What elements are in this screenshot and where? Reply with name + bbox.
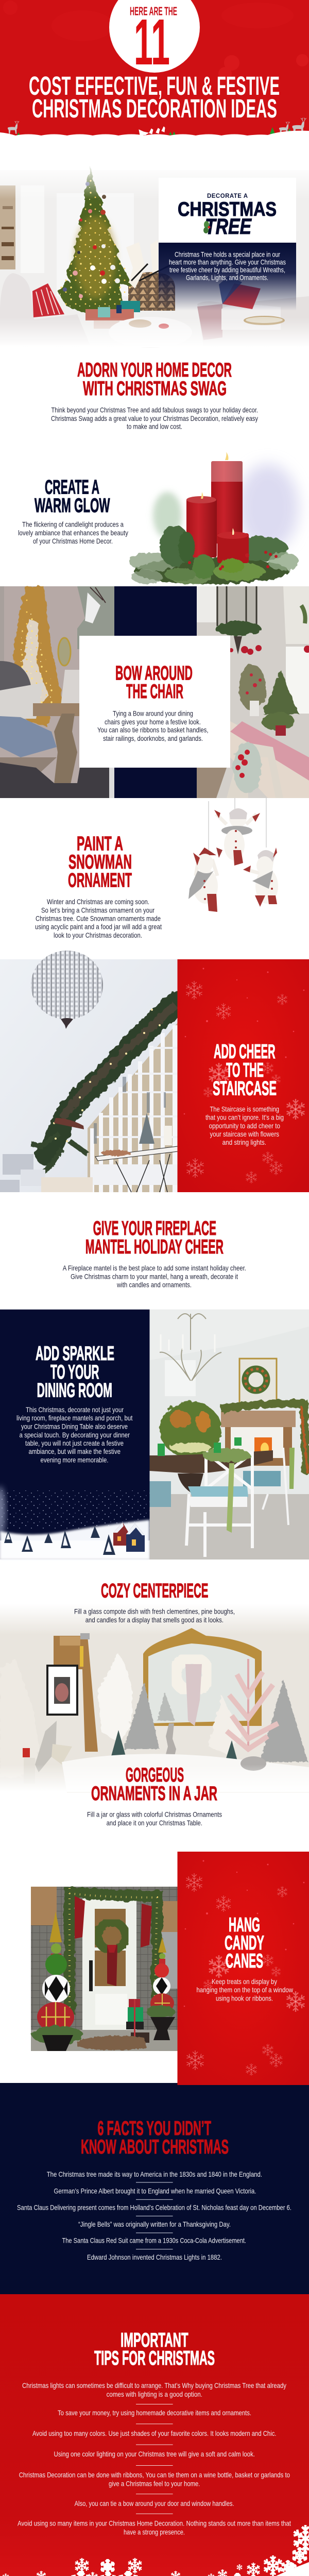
mirror and wreath (239, 1359, 277, 1406)
text: candy canes paragraph (197, 1977, 294, 2003)
heading: create a warm glow (35, 476, 110, 517)
heading: important tips: IMPORTANT (121, 2329, 188, 2351)
heading: cozy centerpiece: COZY CENTERPIECE (101, 1580, 208, 1602)
text: swag paragraph: Think beyond your Christmas Tree and add fabulous swags to your holiday decor. (52, 406, 258, 414)
title (29, 71, 280, 123)
decorative snowflakes (184, 1860, 306, 2076)
text: staircase paragraph: that you can’t ignore. It’s a big (205, 1113, 284, 1122)
icon: small green trees (17, 127, 292, 135)
heading: gorgeous ornaments in a jar: GORGEOUS (126, 1764, 184, 1786)
heading: bow around the chair: BOW AROUND (115, 662, 193, 684)
snow ground (0, 2562, 309, 2576)
round dining table (149, 1450, 273, 1473)
list of tips: comes with lighting is a good option. (107, 2390, 202, 2398)
chandelier (160, 1314, 221, 1381)
panel: bow around the chair (79, 636, 230, 768)
icon: holly (203, 221, 210, 233)
header panel (0, 0, 309, 142)
text: centerpiece paragraph: Fill a glass compote dish with fresh clementines, pine boughs, (74, 1607, 235, 1616)
photo: living room with Christmas tree (0, 163, 309, 348)
text: jar paragraph: Fill a jar or glass with colorful Christmas Ornaments (87, 1810, 222, 1819)
text: warm glow paragraph: The flickering of candlelight produces a (22, 520, 124, 529)
text: tree paragraph (169, 250, 286, 282)
text: staircase paragraph (205, 1105, 284, 1146)
front holly leaves and berries (165, 532, 278, 581)
heading: create a warm glow: WARM GLOW (35, 495, 110, 517)
text: fireplace paragraph: Give Christmas charm to your mantel, hang a wreath, decorate it (71, 1272, 238, 1280)
photo: right dining room with lantern (197, 586, 309, 798)
text: staircase paragraph: and string lights. (222, 1138, 266, 1146)
icon: reindeer right pair (279, 118, 306, 134)
heading: decorate a christmas tree: TREE (205, 214, 252, 239)
text: tree paragraph: Garlands, Lights, and Ornaments. (186, 274, 268, 282)
left candle (186, 492, 217, 557)
white console (62, 1754, 309, 1793)
heading: add cheer to the staircase (213, 1041, 277, 1100)
red ribbons (75, 1896, 152, 1947)
christmas tree (58, 166, 133, 313)
stockings and nutcracker (23, 1721, 72, 1784)
red striped pillow (32, 283, 64, 317)
navy text card (159, 243, 296, 311)
heading: facts: 6 FACTS YOU DIDN’T (97, 2117, 211, 2140)
left topiary (32, 1911, 83, 2051)
panel: navy centre block (114, 586, 197, 798)
number badge circle (109, 0, 200, 73)
chair back with red berries (227, 742, 283, 798)
lantern (215, 586, 261, 654)
heading: bow around the chair (115, 662, 193, 703)
heading: important tips (94, 2329, 215, 2369)
garland around door (70, 1887, 157, 2014)
heading: decorate a christmas tree: DECORATE A (207, 193, 248, 199)
icon: santa sleigh silhouette (139, 127, 165, 135)
crystal orb chandelier (31, 951, 103, 1029)
silver candlestick (165, 1723, 176, 1758)
flowers and small tree (239, 665, 299, 714)
holly leaves (129, 526, 299, 584)
list of facts: The Christmas tree made its way to America in the 1830s and 1840 in the England. (47, 2170, 262, 2178)
text: staircase paragraph: your staircase with flowers (210, 1130, 279, 1138)
text: tree paragraph: Christmas Tree holds a special place in our (175, 250, 280, 258)
text: fireplace paragraph: A Fireplace mantel is the best place to add some instant holiday cheer. (63, 1264, 246, 1272)
text: snowman paragraph: Christmas tree. Cute Snowman ornaments made (36, 914, 161, 922)
snow edge (0, 131, 309, 142)
wreath with bow (98, 1922, 126, 1986)
heading: important tips: TIPS FOR CHRISTMAS (94, 2347, 215, 2369)
text: staircase paragraph: The Staircase is something (210, 1105, 279, 1113)
red hanging baubles (229, 645, 309, 655)
illustration: snowflake border (0, 2525, 309, 2576)
front white chair (186, 1453, 252, 1557)
green garland (31, 1002, 178, 1172)
panel: facts section background (0, 2083, 309, 2294)
photo: white and silver mantel (0, 1604, 309, 1793)
heading: gorgeous ornaments in a jar (91, 1764, 217, 1805)
illustration: snowman ornaments (188, 798, 278, 912)
text: dining paragraph: table, you will not just create a festive (25, 1439, 124, 1447)
text: dining paragraph: your Christmas Dining Table also deserve (21, 1422, 128, 1430)
heading: adorn your home decor (77, 359, 232, 400)
list of tips (18, 2381, 291, 2536)
armchair (0, 273, 90, 345)
text: warm glow paragraph: lovely ambiance that enhances the beauty (18, 529, 128, 537)
list of tips: give a Christmas feel to your home. (109, 2480, 200, 2488)
text: centerpiece paragraph: and candles for a display that smells good as it looks. (85, 1616, 224, 1624)
section: 6 facts (17, 2117, 291, 2261)
pink tree (227, 1659, 278, 1749)
heading: hang candy canes: HANG (229, 1914, 260, 1936)
section: important tips (0, 2294, 309, 2576)
back chair (149, 1448, 288, 1525)
heading: bow around the chair: THE CHAIR (126, 681, 183, 703)
floor (149, 1494, 309, 1560)
text: bow paragraph: Tying a Bow around your dining (113, 709, 193, 717)
panel: add sparkle to your dining room (0, 1310, 149, 1560)
white title card (159, 178, 296, 243)
white feather wreath (175, 1658, 208, 1726)
list of tips: Also, you can tie a bow around your door and window handles. (75, 2499, 234, 2507)
panel: add cheer to the staircase (177, 959, 309, 1192)
decorative snowflakes (184, 968, 306, 1183)
heading: paint a snowman ornament: ORNAMENT (68, 870, 132, 892)
heading: hang candy canes (225, 1914, 264, 1972)
flocked gold tree (4, 586, 63, 726)
gold side table (244, 316, 285, 325)
white door (82, 1896, 136, 2030)
heading: add sparkle (36, 1343, 114, 1402)
text: staircase paragraph: opportunity to add cheer to (209, 1122, 280, 1130)
right snowman (243, 848, 278, 907)
heading: decorate a christmas tree (178, 193, 277, 239)
text: bow paragraph (97, 709, 208, 742)
list of tips: have a strong presence. (124, 2528, 185, 2536)
door mat (77, 2036, 147, 2050)
list of facts: “Jingle Bells” was originally written for a Thanksgiving Day. (78, 2220, 231, 2228)
white flocked trees (0, 1654, 242, 1777)
text: fireplace paragraph: with candles and ornaments. (116, 1280, 192, 1289)
text: swag paragraph (51, 406, 258, 431)
wrapped gifts (85, 301, 140, 329)
icon: reindeer left (8, 121, 19, 134)
round white table (109, 317, 192, 348)
chandelier white (77, 586, 114, 649)
text: snowman paragraph (35, 897, 162, 939)
text: warm glow paragraph: of your Christmas Home Decor. (33, 537, 113, 545)
list of tips: Using one color lighting on your Christmas tree will give a soft and calm look. (54, 2450, 255, 2458)
tall candle (211, 452, 243, 544)
fireplace with log stack (128, 272, 175, 311)
heading: gorgeous ornaments in a jar: ORNAMENTS IN A JAR (91, 1783, 217, 1805)
text: jar paragraph (87, 1810, 222, 1827)
photo: left dining room with tree (0, 586, 114, 798)
text: snowman paragraph: using acyclic paint and a food jar will add a great (35, 923, 162, 931)
wreath at window (301, 605, 305, 623)
text: candy canes paragraph: Keep treats on display by (212, 1977, 277, 1986)
text: jar paragraph: and place it on your Christmas Table. (107, 1819, 202, 1827)
heading: add sparkle: TO YOUR (50, 1361, 99, 1383)
text: swag paragraph: Christmas Swag adds a great value to your Christmas Decoration, relatively easy (51, 414, 258, 422)
heading: hang candy canes: CANDY (225, 1932, 264, 1954)
top snowman (214, 808, 260, 866)
text: dining paragraph: evening more memorable. (40, 1455, 108, 1464)
stair balusters (88, 1023, 178, 1192)
heading: add sparkle: DINING ROOM (37, 1380, 112, 1402)
left snowman (188, 848, 218, 912)
text: dining paragraph: a special touch. By decorating your dinner (20, 1431, 130, 1439)
wooden ladder (54, 1633, 98, 1752)
white stockings and skates (126, 242, 145, 289)
list of facts: German’s Prince Albert brought it to England when he married Queen Victoria. (54, 2187, 256, 2195)
short candle (217, 528, 249, 563)
text: bow paragraph: stair railings, doorknobs, and garlands. (103, 734, 203, 742)
heading: paint a snowman ornament: PAINT A (77, 833, 123, 855)
heading: decorate a christmas tree: CHRISTMAS (178, 198, 277, 221)
heading: here are the: HERE ARE THE (130, 4, 177, 18)
heading: paint a snowman ornament (68, 833, 132, 892)
text: snowman paragraph: Winter and Christmas are coming soon. (47, 897, 149, 906)
heading: add sparkle: ADD SPARKLE (36, 1343, 114, 1365)
bottle-brush trees (111, 1730, 239, 1768)
oval mirror (58, 638, 71, 666)
village house (113, 1522, 145, 1552)
list of facts: Edward Johnson invented Christmas Lights in 1882. (87, 2253, 222, 2261)
sofa with pillows (197, 276, 309, 346)
text: snowman paragraph: look to your Christmas decoration. (54, 931, 142, 939)
photo: candles and holly (129, 452, 299, 584)
stack of gifts (126, 1999, 149, 2043)
floral arrangement (160, 1401, 221, 1458)
heading: paint a snowman ornament: SNOWMAN (68, 851, 132, 873)
heading: create a warm glow: CREATE A (45, 476, 99, 498)
mantel (221, 1411, 296, 1466)
big number 11: 11 (134, 6, 170, 78)
text: dining paragraph (16, 1405, 133, 1464)
heading: facts (81, 2117, 229, 2158)
wing chair and cushion (0, 661, 79, 719)
panel: hang candy canes (177, 1852, 309, 2085)
framed photograph (47, 1666, 77, 1715)
table top and leg (33, 703, 79, 784)
list of facts: The Santa Claus Red Suit came from a 1930s Coca-Cola Advertisement. (62, 2236, 246, 2245)
hanging strings (209, 798, 266, 850)
illustration: snowy village (0, 1486, 149, 1560)
list of tips: To save your money, try using homemade decorative items and ornaments. (58, 2409, 251, 2417)
text: dining paragraph: living room, fireplace mantels and porch, but (16, 1414, 133, 1422)
text: bow paragraph: chairs gives your home a festive look. (105, 718, 201, 726)
photo: staircase with garland (0, 951, 178, 1192)
photo: front door with topiaries (31, 1887, 178, 2051)
text: centerpiece paragraph (74, 1607, 235, 1624)
text: dining paragraph: ambiance, but will make the festive (29, 1447, 121, 1455)
text: swag paragraph: to make and low cost. (127, 422, 182, 431)
wrapped gifts (0, 1154, 93, 1192)
photo: dining room with mantel and chair (149, 1310, 309, 1560)
text: candy canes paragraph: using hook or ribbons. (216, 1994, 273, 2003)
silver tinsel trees (124, 1680, 308, 1762)
text: dining paragraph: This Christmas, decorate not just your (26, 1405, 124, 1414)
text: warm glow paragraph (18, 520, 128, 545)
text: fireplace paragraph (63, 1264, 246, 1289)
heading: give your fireplace mantel holiday cheer (85, 1217, 224, 1258)
list of facts (17, 2170, 291, 2261)
garland on mantel (221, 1403, 306, 1473)
right topiary (146, 1937, 175, 2040)
blue dining chair (0, 716, 57, 788)
heading: add cheer to the staircase: TO THE (226, 1059, 264, 1081)
heading: hang candy canes: CANES (226, 1950, 263, 1972)
text: snowman paragraph: So let’s bring a Christmas ornament on your (41, 906, 154, 914)
dark floor (0, 762, 114, 798)
table with runner (230, 701, 309, 798)
text: bow paragraph: You can also tie ribbons to basket handles, (97, 726, 208, 734)
panel: decorate a christmas tree (159, 178, 296, 311)
gold ornate mirror (143, 1628, 262, 1726)
side table with candle and tree (95, 1113, 178, 1192)
